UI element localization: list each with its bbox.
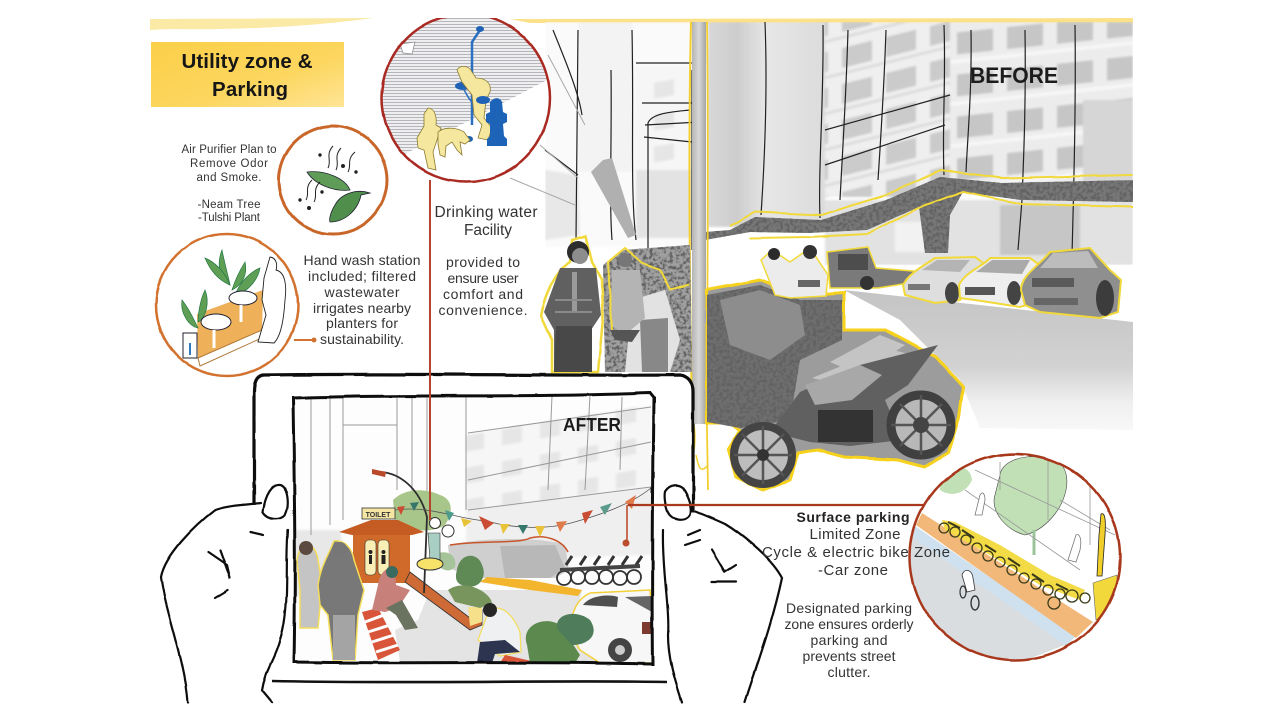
text: surface parking: Surface parking [796,509,910,525]
sketched buildings [293,395,653,600]
parked car 2 [959,258,1044,307]
cable bundle and tree [705,177,1136,253]
bottom seated man and shrub [477,603,594,663]
text: drinking water facility: comfort and [443,286,523,302]
icon: hand wash station circle [156,234,298,376]
parked motorbike pile [707,280,963,490]
text: drinking water facility [434,204,538,318]
text: surface parking: Limited Zone [810,526,900,543]
road [395,590,602,663]
connector: hand wash callout [294,338,316,342]
tree [393,490,451,530]
cyclist [960,570,979,610]
cable bundle yellow outline [730,170,1133,238]
kiosk [339,508,424,583]
orange parking edge [480,577,582,596]
sketched wires and building lines [545,22,1075,257]
text: surface parking [762,509,950,680]
text: drinking water facility: Facility [464,222,512,239]
planters and shrubs [405,552,492,630]
text: drinking water facility: convenience. [438,302,528,318]
title box: Utility zone & [182,50,313,73]
text: hand wash station: planters for [326,315,398,331]
awning [591,158,636,238]
background buildings [545,22,1133,265]
text: hand wash station: Hand wash station [304,252,420,268]
after label: AFTER [563,415,621,435]
road [844,290,1133,430]
trees [994,457,1067,535]
infographic canvas [150,18,1133,704]
paper sign [400,42,415,54]
text: hand wash station: sustainability. [320,331,404,347]
two seated men [761,245,828,298]
panel: before street photo [541,22,1136,490]
text: surface parking: clutter. [828,664,870,680]
icon: smoke squiggles [299,146,357,210]
text: air purifier plan: and Smoke. [196,172,262,184]
dog [438,128,470,157]
background cars [448,537,569,578]
text: surface parking: Designated parking [786,600,912,616]
pedestrians [975,493,1081,562]
text: hand wash station: irrigates nearby [313,300,411,316]
adult drinking [457,66,492,140]
text: surface parking: zone ensures orderly [784,616,914,632]
building lines [965,460,1120,570]
motorbike crowd [603,245,692,372]
parked car 1 [903,257,986,304]
hand right [663,486,782,702]
bike rack [557,556,642,585]
child [417,108,441,170]
road surfaces [900,530,1065,670]
text: air purifier plan [182,144,276,224]
truck [827,247,925,290]
basins [201,314,231,330]
text: hand wash station: included; filtered [308,268,416,284]
white car [571,590,655,663]
callout lines [430,180,925,520]
text: hand wash station [304,252,420,347]
parked car 3 [1021,248,1121,318]
text: air purifier plan: -Tulshi Plant [198,212,261,224]
top yellow brush stripes [150,18,1133,30]
parking callout dot [622,505,630,546]
hand left [161,485,288,702]
hydrant [486,98,507,146]
bench with seated man [362,566,418,660]
text: drinking water facility: ensure user [448,270,519,286]
front wheel [734,426,792,484]
text: air purifier plan: -Neam Tree [198,199,260,211]
icon: air purifier leaves circle [279,126,387,234]
panel: after street scene [293,395,655,663]
thin perspective lines beside water circle [510,55,585,205]
text: drinking water facility: provided to [446,254,520,270]
text: drinking water facility: Drinking water [434,204,538,221]
icon: bicycle parking circle [900,454,1120,670]
text: air purifier plan: Remove Odor [190,158,268,170]
yellow post and kiosk [1097,514,1105,576]
text: surface parking: prevents street [802,648,896,664]
icon: drinking water circle [380,18,552,184]
tablet frame [253,374,693,682]
hatched pavement [382,18,546,154]
street lamp and drinking fountain [372,469,454,593]
orange planter [197,290,263,358]
man standing in foreground [541,236,603,372]
fountain post [455,26,484,142]
plants [182,250,260,328]
before label: BEFORE [970,63,1058,88]
utility pole [689,22,708,490]
crate base [198,330,266,366]
rear wheel [891,395,951,455]
title box [151,42,344,107]
tablet screen outline [293,393,654,664]
text: hand wash station: wastewater [324,284,400,300]
bunting flags [395,488,651,537]
title box: Parking [212,78,288,101]
large motorcycle [734,345,951,484]
text: air purifier plan: Air Purifier Plan to [182,144,276,156]
bicycle row [939,520,1090,609]
text: surface parking: Cycle & electric bike Zone [762,544,950,561]
icon: leaves [307,172,370,222]
kiosk: TOILET [366,512,391,519]
person [258,257,286,343]
text: surface parking: parking and [810,632,888,648]
pedestrians [297,541,364,660]
text: surface parking: -Car zone [818,562,888,579]
